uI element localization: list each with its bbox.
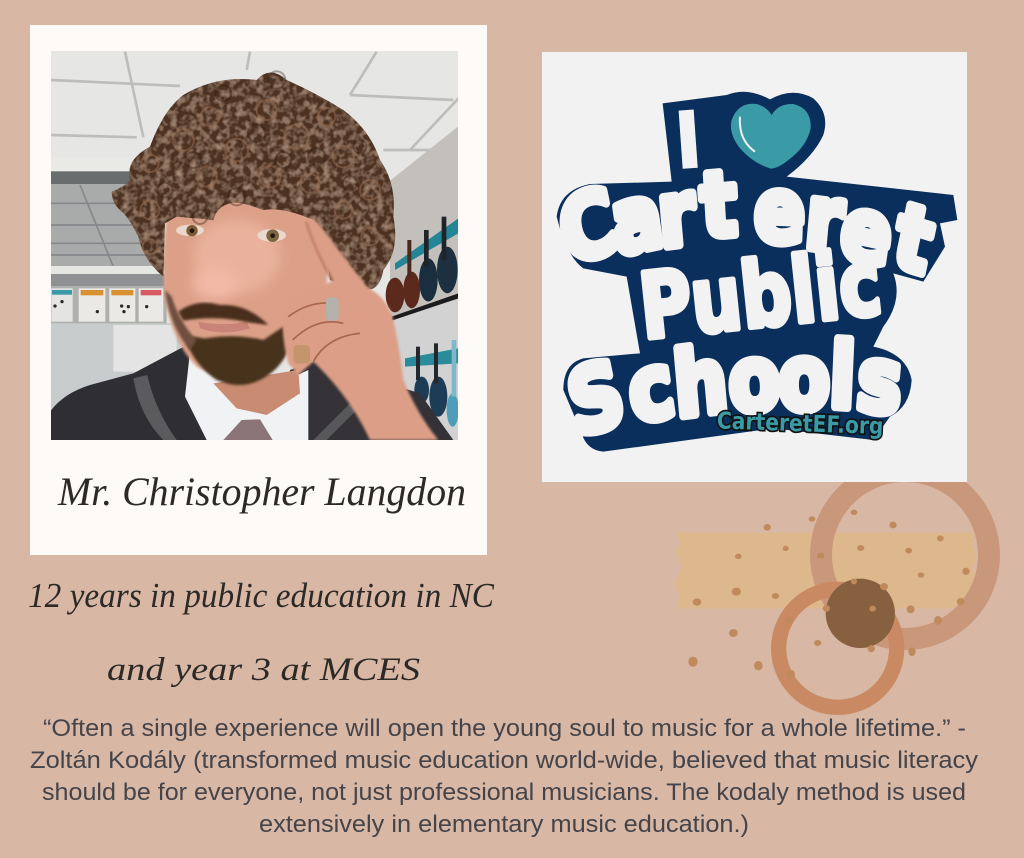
name: Mr. Christopher Langdon (57, 469, 466, 514)
large ring (821, 471, 989, 639)
logo heart (731, 104, 811, 169)
neck (213, 370, 300, 415)
logo letter I: I (670, 93, 706, 188)
teacher photo (50, 50, 460, 440)
beard (187, 327, 288, 385)
career line one: 12 years in public education in NC (28, 576, 495, 615)
quotation (30, 715, 978, 838)
ukulele shelf (386, 217, 459, 427)
logo: I love Carteret Public Schools (550, 92, 957, 458)
sweater (50, 343, 207, 440)
right wall (390, 126, 458, 317)
face (164, 190, 330, 378)
chord charts (51, 288, 163, 322)
quotation: extensively in elementary music education.) (259, 811, 749, 838)
logo navy backing (557, 92, 957, 452)
eyes (176, 225, 286, 242)
tape strip (675, 533, 977, 608)
polaroid card (30, 25, 487, 555)
speckles (688, 510, 970, 679)
decorative shapes (675, 471, 989, 707)
mustache (178, 303, 268, 325)
logo panel (542, 52, 967, 482)
dark circle (826, 579, 895, 648)
quotation: should be for everyone, not just professional musicians. The kodaly method is used (42, 779, 966, 806)
curly hair (112, 71, 395, 290)
logo word Public: Public (635, 231, 886, 360)
ring (326, 297, 339, 321)
logo word Carteret: Carteret (550, 151, 942, 295)
logo url: CarteretEF.org (716, 406, 884, 440)
career line two: and year 3 at MCES (107, 652, 420, 688)
quotation: “Often a single experience will open the young soul to music for a whole lifetime.” - (43, 715, 966, 742)
small ring (779, 589, 897, 707)
collar and tie (185, 352, 308, 440)
hand (283, 218, 438, 440)
quotation: Zoltán Kodály (transformed music education world-wide, believed that music literacy (30, 747, 978, 774)
logo word Schools: Schools (559, 323, 907, 458)
